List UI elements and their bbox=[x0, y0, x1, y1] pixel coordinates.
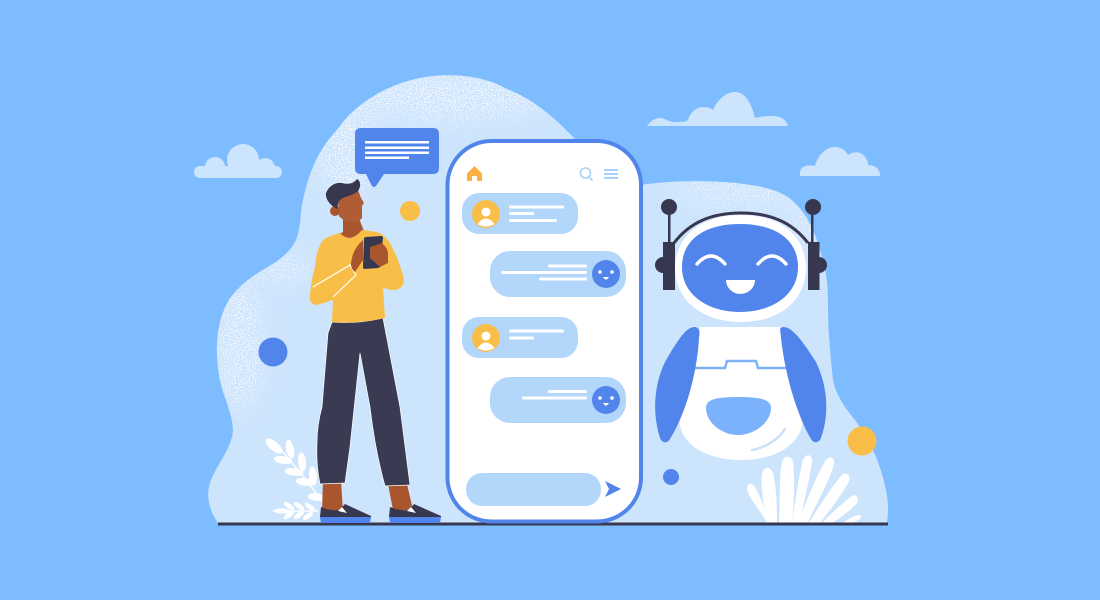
left shoe bbox=[320, 504, 371, 523]
chat bubble 3: user bbox=[462, 317, 578, 358]
person with smartphone bbox=[310, 179, 441, 523]
plant: right white fronds bbox=[747, 455, 861, 523]
hand: back bbox=[351, 240, 363, 272]
chat bubble 4: bot bbox=[490, 377, 626, 423]
cloud: left bbox=[194, 144, 282, 178]
background blob bbox=[208, 75, 888, 523]
icon: home bbox=[467, 166, 482, 181]
icon: search bbox=[580, 168, 592, 180]
robot face bbox=[682, 224, 798, 312]
chat bubble 2: bot bbox=[490, 251, 626, 297]
icon: menu bbox=[604, 169, 618, 179]
mouth bbox=[726, 280, 755, 294]
eyes bbox=[697, 256, 786, 264]
phone in hand bbox=[363, 236, 383, 269]
decorative dot: blue small right bbox=[663, 469, 679, 485]
robot body bbox=[679, 327, 803, 460]
speech bubble bbox=[355, 128, 439, 187]
headphones bbox=[655, 242, 827, 290]
decorative dot: yellow right bbox=[848, 426, 876, 456]
face bbox=[338, 190, 364, 222]
message input field bbox=[466, 473, 601, 506]
belly screen bbox=[706, 397, 771, 435]
ground line bbox=[218, 522, 888, 526]
right arm bbox=[780, 327, 826, 442]
decorative dot: yellow near speech bubble bbox=[400, 201, 420, 221]
robot bbox=[655, 199, 827, 460]
hand: front bbox=[370, 243, 388, 267]
left arm bbox=[655, 327, 700, 442]
robot head bbox=[675, 215, 806, 322]
legs: ankles bbox=[322, 480, 413, 512]
sweater bbox=[310, 230, 404, 322]
body shine bbox=[752, 429, 785, 450]
body seam bbox=[692, 361, 788, 368]
chat bubble 1: user bbox=[462, 193, 578, 234]
illustration: chatbot conversation scene bbox=[194, 75, 888, 526]
cloud: right bbox=[800, 147, 880, 176]
plant: left white branches bbox=[263, 436, 324, 521]
neck bbox=[339, 216, 364, 240]
headband bbox=[674, 213, 808, 243]
sleeve cuff lines bbox=[313, 265, 356, 297]
decorative dot: blue left bbox=[258, 338, 288, 366]
pants bbox=[317, 318, 410, 486]
hair bbox=[326, 179, 360, 209]
ear bbox=[330, 206, 340, 216]
cloud: top bbox=[647, 92, 788, 126]
phone mockup bbox=[448, 141, 641, 522]
right shoe bbox=[389, 504, 441, 523]
antennas bbox=[661, 199, 821, 244]
icon: send arrow bbox=[605, 481, 621, 497]
